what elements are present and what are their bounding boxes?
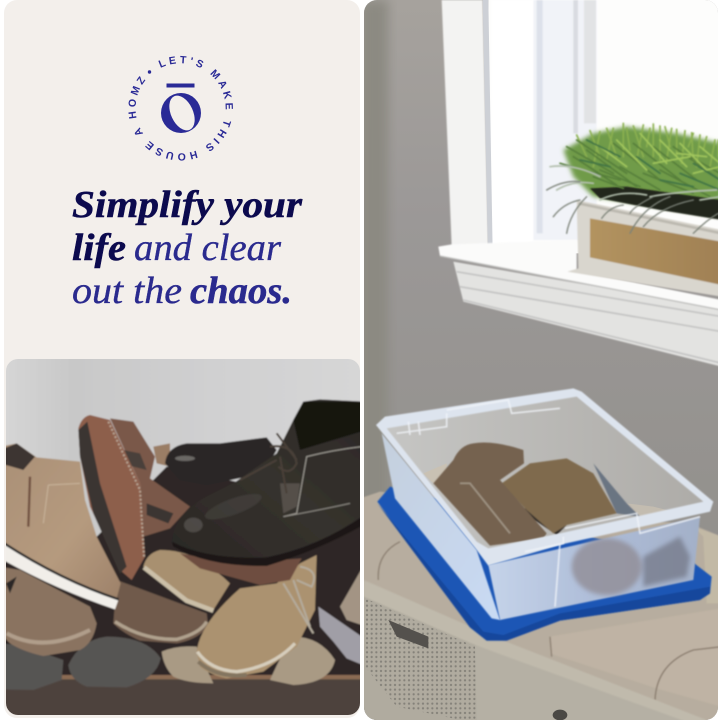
brown shoe bottom left: [0, 567, 97, 656]
bench cushion: [360, 492, 720, 720]
boots: [423, 442, 640, 546]
photo: boots stored in clear box: [360, 0, 720, 720]
drawer knob: [553, 710, 567, 720]
towel: [317, 606, 360, 665]
circular tagline: LET'S MAKE THIS HOUSE A HOMZ: [128, 56, 233, 161]
box rim: [376, 388, 713, 566]
clear box: [376, 388, 713, 620]
photo: pile of shoes: [0, 357, 367, 720]
heading: life: [72, 227, 126, 269]
bench and box scene: [360, 388, 720, 720]
storage basket: [365, 598, 477, 720]
wall: [6, 359, 360, 537]
tan boot with white sole: [0, 443, 121, 609]
heading: [72, 184, 303, 312]
bench frame: [360, 578, 720, 720]
tan shoe centre: [143, 550, 230, 611]
dark shoe behind: [165, 437, 277, 485]
window trim: [442, 0, 488, 248]
heading: chaos.: [190, 270, 292, 312]
dark gap behind shoes: [0, 467, 367, 675]
window pane: [488, 0, 720, 253]
box clips: [397, 400, 700, 607]
curtain: [534, 0, 596, 240]
heading: and clear: [134, 227, 281, 269]
box interior: [386, 396, 703, 550]
grey slippers: [0, 637, 161, 690]
moccasin sole under black boot: [180, 553, 302, 585]
moccasin sole: [78, 415, 145, 580]
window scene: [360, 0, 720, 720]
planter box: [567, 200, 720, 297]
moccasin upper: [110, 418, 190, 537]
heading: out the: [72, 270, 182, 312]
front of box: [488, 517, 700, 620]
heading: Simplify your: [72, 184, 303, 226]
pale shoe at right edge: [339, 570, 360, 626]
panel: left column: [4, 0, 360, 718]
left side of box: [382, 433, 500, 620]
grey wall: [360, 0, 720, 720]
brown shoe centre: [113, 580, 208, 643]
fuzzy beige slippers: [162, 637, 335, 685]
blue lid: [377, 487, 712, 641]
sill: [438, 240, 720, 367]
logo badge: [128, 56, 233, 161]
logo dot: [148, 70, 151, 74]
black boot: [172, 399, 367, 566]
cushion seen through box: [423, 463, 447, 483]
logo mark: [161, 84, 201, 134]
boots seen through front: [572, 537, 690, 595]
shelf: [6, 674, 360, 715]
grass: [547, 123, 720, 233]
tan shoe lower right: [197, 555, 317, 678]
